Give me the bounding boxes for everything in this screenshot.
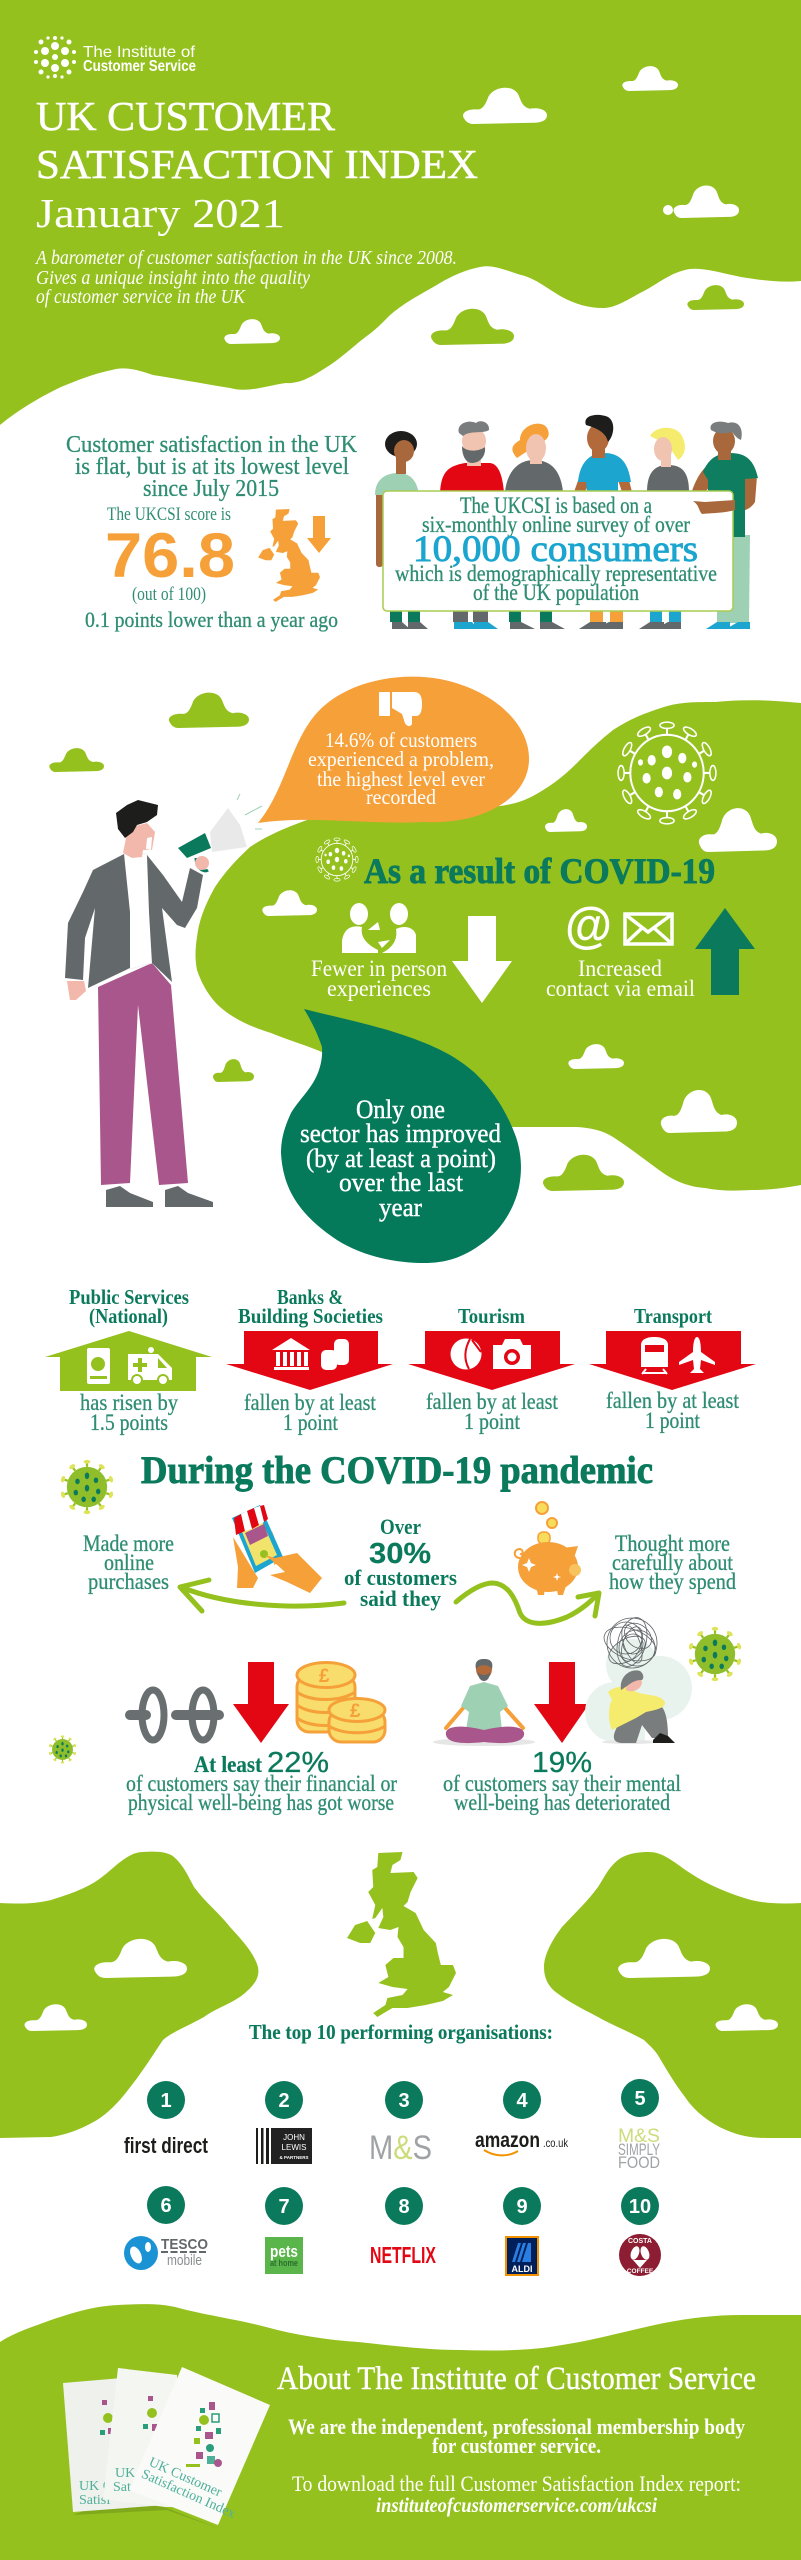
person 4 [574,415,632,629]
30 percent statement: of customers [344,1565,457,1590]
logo: Aldi [505,2236,539,2276]
heading: satisfaction flat [66,432,358,502]
result text: fallen by at least [426,1389,559,1414]
heading [69,1285,189,1328]
logo: Tesco mobile [124,2236,208,2270]
red arrow [226,1331,393,1390]
icon: camera [493,1339,531,1369]
logo: Netflix: NETFLIX [370,2242,436,2268]
people holding survey sign [375,415,758,629]
person 2 [440,421,504,629]
icon: scribble thought [599,1614,661,1670]
result text [606,1388,740,1433]
sign text: six-monthly online survey of over [422,512,690,537]
man with megaphone [65,794,262,1207]
pointing hand [693,500,735,514]
result text: has risen by [80,1390,178,1415]
rank badges row 2: 9 [516,2196,528,2218]
callout text: recorded [366,785,436,809]
survey sign board [383,491,733,611]
online purchases text: Made more [83,1531,174,1556]
icon: piggy bank [515,1502,581,1595]
result text: 1.5 points [90,1410,168,1435]
shirt [124,854,152,969]
label: experiences [327,976,431,1001]
head [116,800,158,858]
icon: plane [679,1337,715,1373]
sector: public services [45,1285,212,1435]
logo wordmark: The Institute of [83,44,196,61]
heading: As a result of COVID-19: As a result of COVID-19 [364,851,715,891]
logo: Tesco mobile: mobile [167,2252,202,2269]
membership text: We are the independent, professional membership body [288,2414,745,2439]
intro text: of customer service in the UK [36,286,246,308]
thought more carefully text: Thought more [615,1531,730,1556]
sector: tourism [408,1304,575,1434]
label [546,956,695,1001]
heading: About: About The Institute of Customer Service [277,2361,756,2397]
red down arrow [534,1662,589,1743]
callout: only one sector improved: Only one [356,1095,445,1124]
pale background blobs [585,1639,692,1742]
logo: pets at home: at home [270,2258,298,2268]
result text [244,1390,377,1435]
description: well-being has deteriorated [454,1790,670,1815]
logo: pets at home: pets [270,2242,298,2261]
callout: only one sector improved: (by at least a point) [306,1144,496,1173]
label: Increased [578,956,662,981]
person 5 [639,428,689,629]
thought more carefully text [609,1531,736,1594]
heading: (National) [89,1304,168,1328]
booklet back title: UK Cu [79,2479,119,2494]
stat: at least 22%: At least [194,1752,262,1777]
clouds: bottom blobs [25,1939,778,2031]
heading: satisfaction flat: is flat, but is at its lowest level [75,454,349,480]
intro text: A barometer of customer satisfaction in the UK since 2008. [34,247,457,269]
jacket [65,854,203,988]
logo: M&S Simply Food [618,2126,660,2172]
result text: 1 point [283,1410,339,1435]
sign text: which is demographically representative [395,561,717,586]
icon: orange down arrow [307,516,331,553]
description: of customers say their mental [443,1771,681,1796]
callout text: experienced a problem, [308,747,494,771]
result text: fallen by at least [244,1390,377,1415]
booklet shadow [73,2494,220,2529]
sign text: The UKCSI is based on a [460,493,652,518]
booklet back [63,2378,165,2512]
red arrow [408,1331,575,1390]
callout text [308,728,494,809]
out of 100: (out of 100) [132,584,206,605]
title: UK CUSTOMER [36,93,336,139]
booklet back title: Satisf [79,2493,111,2508]
logo: John Lewis: LEWIS [282,2143,306,2152]
green blob right [544,1852,801,2138]
logo: John Lewis [256,2128,312,2164]
icon: hand holding phone [232,1505,322,1593]
rank badges row 1 [147,2079,659,2119]
label: contact via email [546,976,695,1001]
label: Fewer in person [311,956,447,981]
increased email column [546,897,755,1001]
intro text [34,247,457,308]
title: January 2021 [36,190,285,236]
rank badges row 2: 10 [629,2196,651,2218]
up arrow [695,908,755,995]
download link: instituteofcustomerservice.com/ukcsi [376,2493,657,2517]
heading: satisfaction flat: since July 2015 [143,476,279,502]
house shape [45,1331,212,1391]
icon: thumbs down [379,692,422,726]
logo: Costa Coffee: COFFEE [627,2268,654,2275]
logo: M&S Simply Food: M&S [618,2126,660,2147]
logo: Costa Coffee: COSTA [628,2238,652,2245]
booklet front [129,2367,270,2525]
booklet middle title: Satis [113,2480,140,2495]
description: of customers say their financial or [126,1771,397,1796]
30 percent statement: 30% [369,1538,431,1570]
booklet middle title [113,2466,148,2495]
icon: pound coins [297,1662,385,1742]
intro text: Gives a unique insight into the quality [36,267,310,289]
thought more carefully text: how they spend [609,1569,736,1594]
callout text: the highest level ever [317,767,485,791]
icon: pound coins: £ [350,1701,361,1722]
logo: John Lewis: JOHN [283,2133,305,2142]
speech bubble shape [258,677,529,823]
result text [80,1390,178,1435]
person 1 [375,431,428,629]
hand [67,981,86,1000]
icon: small virus left [49,1735,76,1764]
logo: Tesco mobile: TESCO [161,2236,208,2253]
icon: large white virus [618,722,716,824]
logo: amazon: .co.uk [543,2136,569,2150]
description [443,1771,681,1815]
heading: Building Societies [238,1304,383,1328]
logo: M&S Simply Food: FOOD [618,2153,660,2172]
icon: green UK map [347,1852,456,2017]
heading: Transport [634,1304,712,1328]
icon: two people exchanging [342,903,416,953]
logo: Costa Coffee [619,2234,661,2276]
online purchases text: online [104,1550,154,1575]
down arrow [452,916,512,1003]
logo: M&S: M&S [369,2129,432,2167]
30 percent statement [344,1514,457,1611]
online purchases text: purchases [88,1569,169,1594]
icon: ambulance [128,1347,172,1385]
header background: green wave [0,0,801,425]
icon: virus right [688,1627,742,1681]
logo: The Institute of Customer Service [34,36,196,79]
result text [426,1389,559,1434]
icon: sad woman sitting [602,1670,675,1744]
icon: green virus heading [60,1460,114,1514]
download text: To download the full Customer Satisfaction Index report: [292,2471,741,2496]
person 3 [505,424,565,629]
booklet middle [103,2368,180,2507]
rank badges row 1: 5 [634,2088,646,2110]
score value 76.8: 76.8 [105,521,235,591]
icon: dumbbell [130,1690,219,1740]
mental well-being panel [433,1614,692,1815]
stat: at least 22%: 22% [267,1747,329,1779]
about panel [277,2361,756,2517]
icon: small white virus [316,838,358,881]
sector: banks and building societies [226,1285,393,1435]
result text: 1 point [464,1409,521,1434]
membership text: for customer service. [432,2433,601,2458]
thought more carefully text: carefully about [612,1550,734,1575]
icon: train [641,1337,668,1374]
arrow: to online purchases [180,1580,344,1611]
booklet back title [79,2479,119,2508]
trousers [98,963,188,1185]
rank badges row 2: 7 [278,2196,290,2218]
callout: problem experienced [258,677,529,823]
heading: Tourism [458,1304,525,1328]
sign text: 10,000 consumers [413,529,698,570]
30 percent statement: said they [360,1586,441,1611]
booklet front art [186,2402,222,2467]
heading: During the COVID-19 pandemic: During the COVID-19 pandemic [141,1449,653,1492]
logo: John Lewis: & PARTNERS [280,2155,308,2160]
icon: beach ball [450,1338,482,1370]
icon: at sign: @ [565,897,612,953]
logo wordmark [83,44,196,75]
satisfaction panel [66,432,358,632]
icon: bank [272,1338,310,1370]
logo: pets at home [265,2237,303,2274]
booklet back art [100,2400,113,2435]
heading: Public Services [69,1285,189,1309]
icon: passport [87,1348,110,1384]
logo: M&S Simply Food: SIMPLY [618,2140,660,2159]
sector: transport [589,1304,756,1433]
person 6 [692,422,758,629]
green blob left [0,1852,258,2138]
sign text [395,493,717,605]
sign text: of the UK population [473,580,639,605]
logo wordmark: Customer Service [83,58,196,75]
arrow: to thought more carefully [456,1583,599,1623]
heading: satisfaction flat: Customer satisfaction in the UK [66,432,358,458]
label [311,956,447,1001]
title [36,93,478,236]
stat: at least 22% [194,1747,329,1779]
shoes [106,1186,213,1207]
description: physical well-being has got worse [128,1790,394,1815]
rank badges row 2: 6 [160,2195,172,2217]
icon: orange UK map [258,509,320,602]
icon: coin stacks [321,1339,349,1370]
icon: pound coins: £ [319,1666,330,1687]
clouds: COVID section [49,693,777,1191]
logo: amazon: amazon [475,2129,540,2152]
booklet front title: UK Customer [146,2455,224,2501]
title: SATISFACTION INDEX [36,141,478,187]
membership text [288,2414,745,2458]
result text: 1 point [645,1408,701,1433]
callout text: 14.6% of customers [325,728,477,752]
booklet middle title: UK C [115,2466,148,2481]
callout: only one sector improved: over the last [339,1168,464,1197]
clouds: header [224,66,744,345]
booklet front title: Satisfaction Index [139,2467,238,2522]
red arrow [589,1331,756,1390]
score label: The UKCSI score is [107,504,231,525]
description [126,1771,397,1815]
booklet middle art [143,2396,157,2431]
callout: only one sector improved [281,1009,521,1263]
megaphone [178,794,262,871]
rank badges row 2 [147,2186,659,2225]
stat: 19%: 19% [532,1747,592,1779]
result text: fallen by at least [606,1388,740,1413]
heading: top 10: The top 10 performing organisations: [249,2020,553,2044]
rank badges row 1: 4 [516,2090,528,2112]
30 percent statement: Over [380,1514,421,1539]
red down arrow [233,1662,289,1743]
rank badges row 1: 2 [278,2090,290,2112]
rank badges row 2: 8 [398,2196,410,2218]
logo: first direct: first direct [124,2133,209,2158]
heading: Banks & [277,1285,343,1309]
callout: only one sector improved: sector has improved [300,1119,501,1148]
rank badges row 1: 1 [160,2090,172,2112]
financial well-being panel [126,1662,397,1815]
fewer in person column [311,903,512,1003]
rank badges row 1: 3 [398,2090,410,2112]
icon: meditating man [433,1659,535,1746]
COVID green blob background [196,700,801,1191]
year comparison: 0.1 points lower than a year ago [85,607,338,632]
online purchases text [83,1531,174,1594]
report booklets [63,2367,270,2529]
heading [238,1285,383,1328]
callout: only one sector improved: year [379,1193,422,1222]
footer background [0,2304,801,2560]
logo mark [34,36,76,79]
icon: envelope [625,914,672,944]
logo: Aldi: ALDI [512,2264,532,2274]
